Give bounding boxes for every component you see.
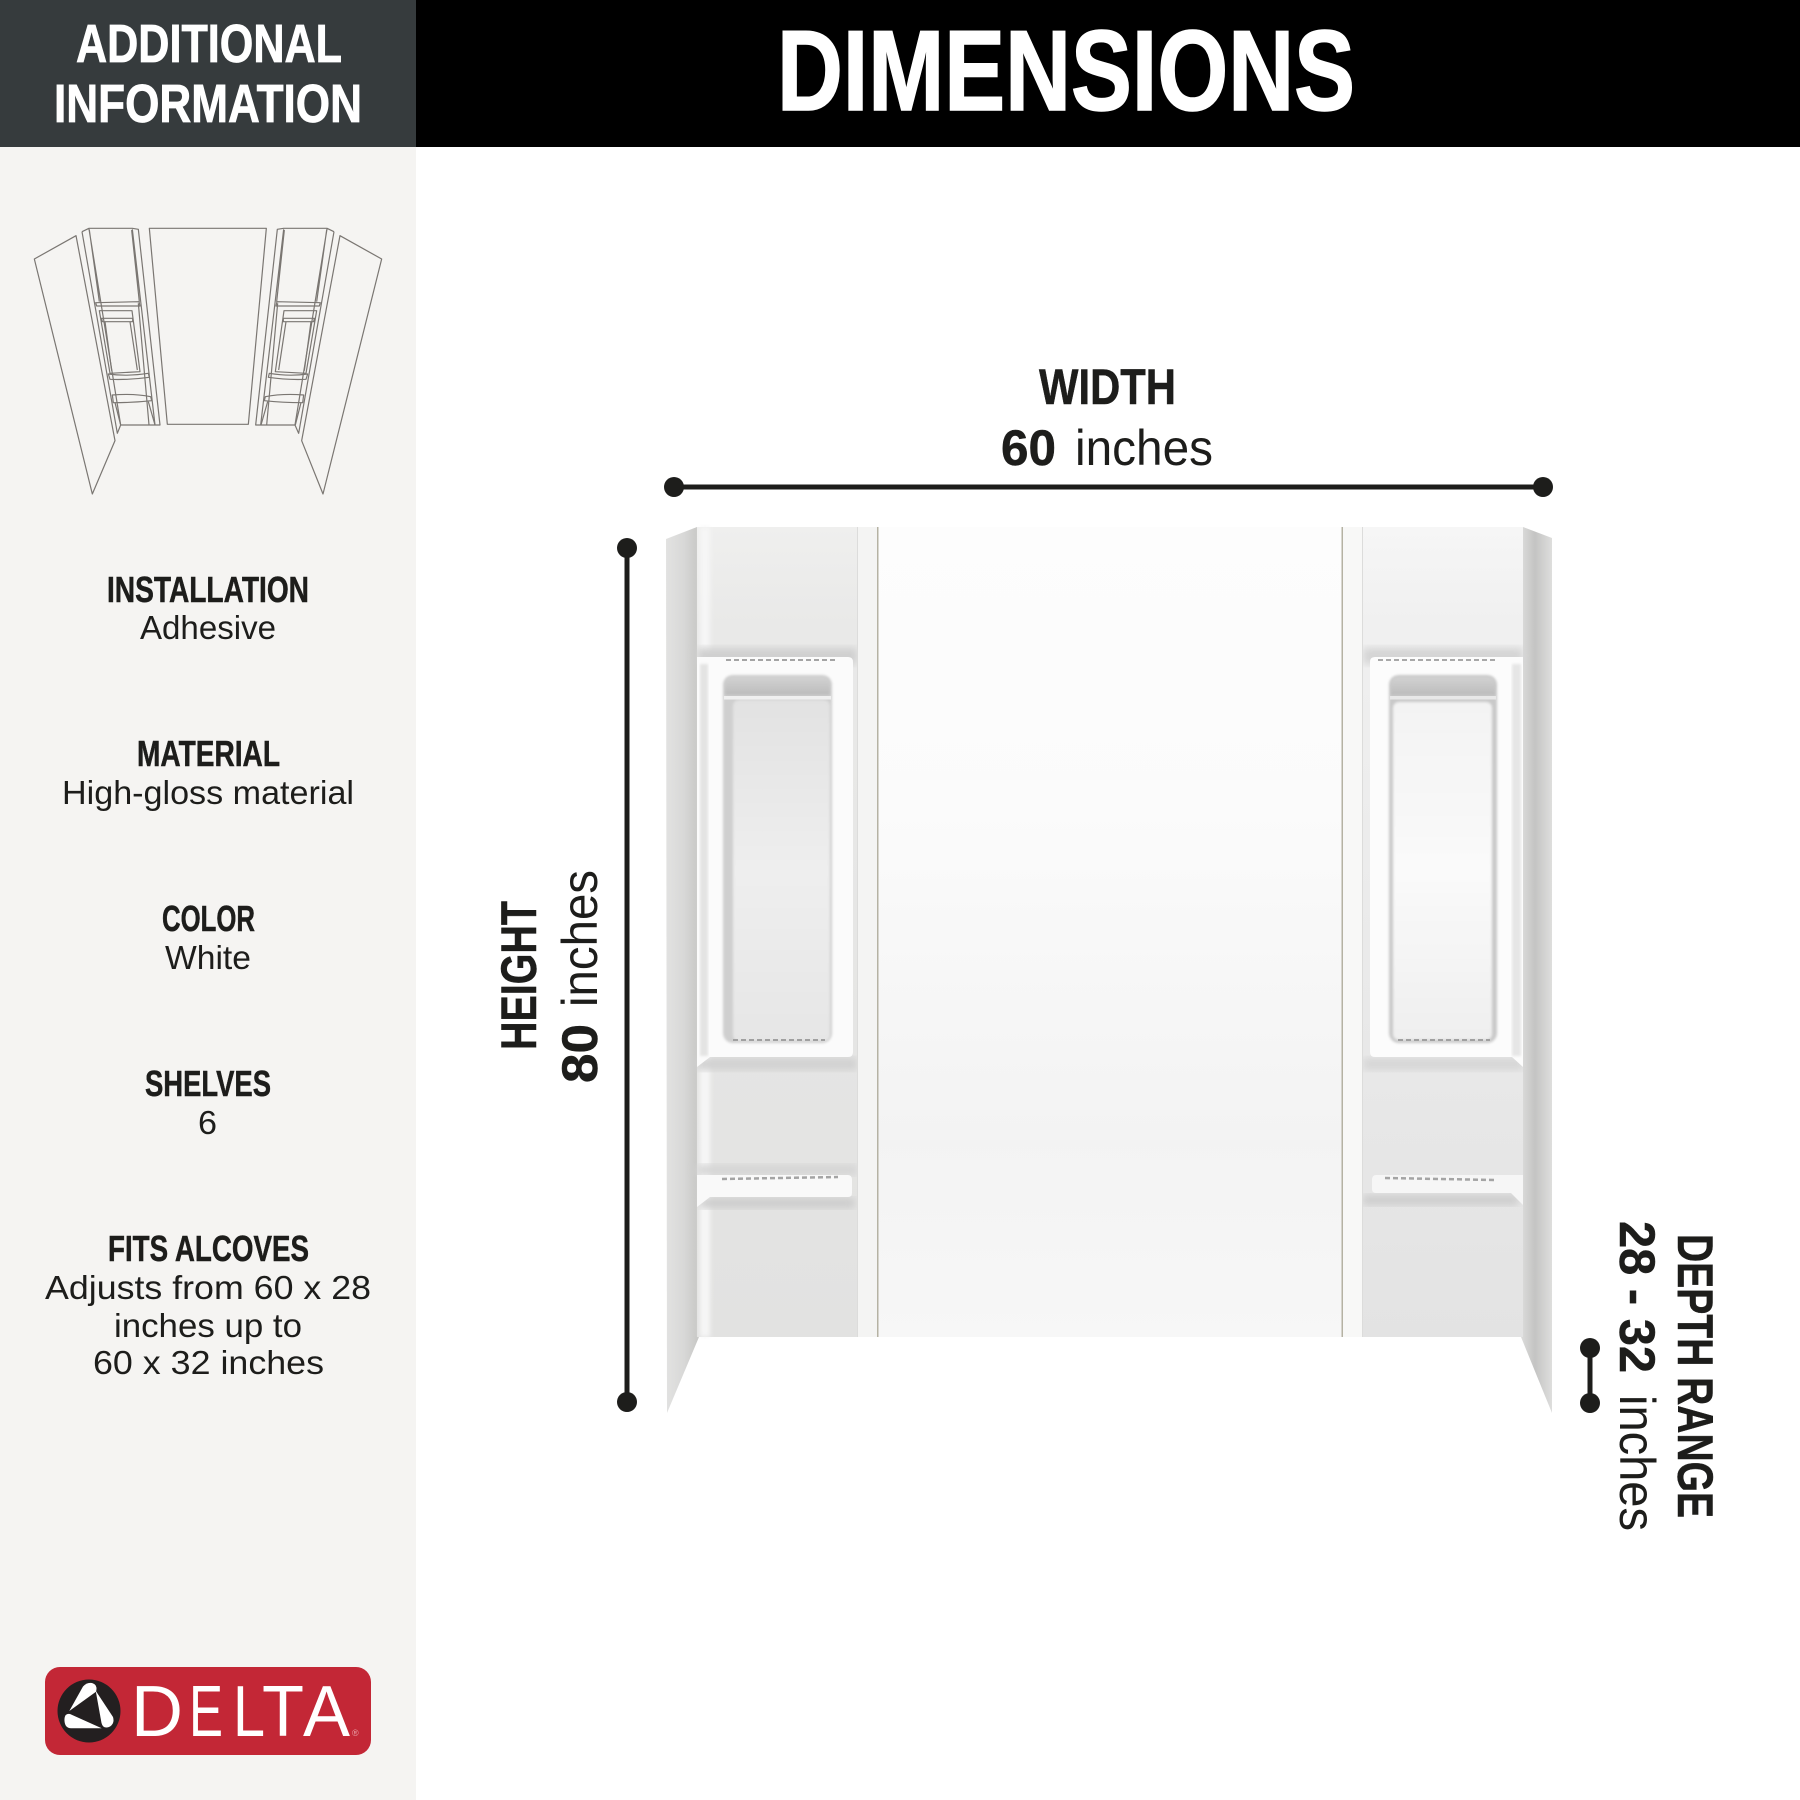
- spec: installation: Adhesive: [140, 609, 276, 646]
- sidebar heading: additional information: ADDITIONAL: [76, 14, 342, 74]
- depth range dimension: DEPTH RANGE: [1667, 1234, 1723, 1518]
- spec: color: COLOR: [162, 898, 255, 939]
- spec: fits alcoves: FITS ALCOVES: [108, 1228, 309, 1269]
- right small shelf: [1372, 1175, 1523, 1205]
- spec: fits alcoves: inches up to: [114, 1307, 302, 1344]
- depth range dimension: inches: [1609, 1395, 1665, 1531]
- spec: material: MATERIAL: [137, 733, 280, 774]
- spec: shelves: [145, 1063, 271, 1141]
- sidebar heading: additional information: INFORMATION: [54, 74, 362, 134]
- width dimension: WIDTH: [1039, 359, 1176, 415]
- logo: delta: E: [189, 1672, 223, 1752]
- left small shelf: [697, 1175, 852, 1207]
- logo: delta: A: [303, 1672, 350, 1752]
- spec: installation: INSTALLATION: [107, 569, 309, 610]
- sidebar heading: additional information: [0, 0, 416, 147]
- left seam strip: [857, 527, 878, 1337]
- right seam strip: [1342, 527, 1363, 1337]
- right large shelf niche: [1370, 657, 1523, 1067]
- icon: line drawing of wall set: [34, 228, 382, 494]
- depth range dimension: 28 - 32: [1609, 1221, 1665, 1373]
- width dimension: [664, 359, 1553, 497]
- title bar: dimensions: DIMENSIONS: [777, 8, 1355, 135]
- spec: fits alcoves: [45, 1228, 371, 1381]
- sidebar panel: additional information: [0, 0, 416, 1800]
- spec: shelves: 6: [198, 1104, 217, 1141]
- left side wall: [666, 527, 699, 1413]
- height dimension: 80: [552, 1024, 608, 1083]
- spec: color: White: [165, 939, 251, 976]
- spec: material: [62, 733, 354, 811]
- left back panel: [697, 527, 857, 1337]
- center panel: [878, 527, 1342, 1337]
- spec: fits alcoves: Adjusts from 60 x 28: [45, 1269, 371, 1306]
- depth range dimension: [1580, 1221, 1723, 1531]
- logo: delta: T: [262, 1672, 304, 1752]
- height dimension: [491, 538, 637, 1412]
- logo: delta: D: [131, 1672, 183, 1752]
- logo: delta: L: [233, 1672, 265, 1752]
- right back panel: [1363, 527, 1523, 1337]
- left large shelf niche: [697, 657, 853, 1067]
- logo: delta: ®: [352, 1728, 359, 1738]
- spec: material: High-gloss material: [62, 774, 354, 811]
- title bar: dimensions: [416, 0, 1800, 147]
- spec: shelves: SHELVES: [145, 1063, 271, 1104]
- height dimension: HEIGHT: [491, 901, 547, 1050]
- right side wall: [1521, 527, 1552, 1413]
- spec: color: [162, 898, 255, 976]
- width dimension: inches: [1075, 420, 1213, 476]
- width dimension: 60: [1001, 420, 1056, 476]
- logo: delta: [45, 1667, 371, 1755]
- spec: installation: [107, 569, 309, 646]
- spec: fits alcoves: 60 x 32 inches: [93, 1344, 324, 1381]
- height dimension: inches: [552, 870, 608, 1007]
- product image: shower wall set: [666, 527, 1552, 1413]
